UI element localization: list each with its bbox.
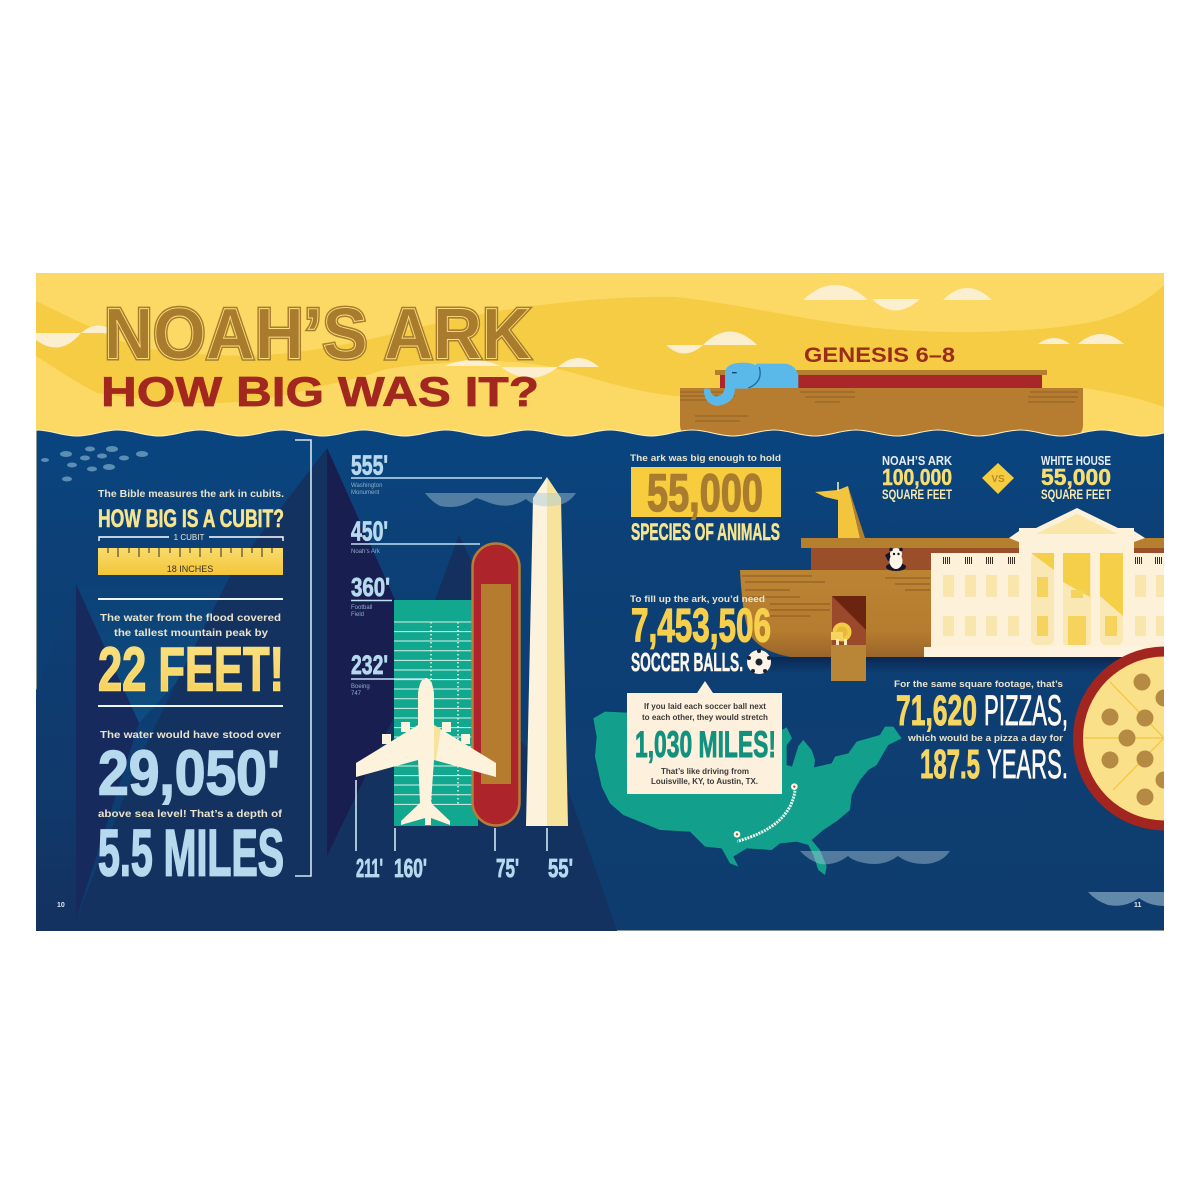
text block: 22 feet bbox=[98, 614, 280, 692]
text block: depth: The water would have stood over bbox=[100, 729, 281, 741]
text block: pizzas: PIZZAS, bbox=[984, 687, 1068, 735]
comparison: Noah's Ark bbox=[882, 454, 953, 502]
ruler: 1 CUBIT bbox=[174, 533, 204, 542]
text block: pizzas: 187.5 bbox=[920, 741, 980, 787]
text block: depth: 29,050' bbox=[98, 738, 280, 808]
clouds bbox=[36, 285, 1124, 378]
height labels: Boeing bbox=[351, 684, 370, 690]
mountains bbox=[36, 448, 617, 931]
width labels: 211' bbox=[356, 853, 383, 883]
White House bbox=[924, 508, 1167, 657]
text block: pizzas: 71,620 bbox=[896, 687, 977, 735]
callout: Louisville, KY, to Austin, TX. bbox=[651, 777, 758, 786]
callout: to each other, they would stretch bbox=[642, 713, 768, 722]
comparison: Noah's Ark: NOAH’S ARK bbox=[882, 454, 952, 468]
title: Noah's Ark bbox=[106, 306, 534, 361]
windows bbox=[943, 575, 1167, 636]
icon: pizza bbox=[1073, 646, 1200, 830]
comparison: White House bbox=[1041, 454, 1112, 502]
page number 10: 10 bbox=[57, 902, 65, 909]
text block: 55,000 species: 55,000 bbox=[647, 464, 763, 523]
scripture reference: GENESIS 6–8 bbox=[804, 344, 955, 367]
comparison: White House: SQUARE FEET bbox=[1041, 487, 1112, 502]
width labels: 75' bbox=[496, 853, 519, 883]
US map bbox=[593, 712, 902, 875]
text block: 22 feet: the tallest mountain peak by bbox=[114, 627, 268, 639]
icon: giraffe bbox=[815, 482, 865, 538]
water background bbox=[36, 430, 1184, 931]
shadow under the ark bbox=[770, 657, 1122, 670]
cloud reflection bbox=[425, 493, 576, 507]
door bbox=[831, 596, 866, 681]
width labels: 160' bbox=[394, 853, 427, 883]
comparison: Noah's Ark: 100,000 bbox=[882, 464, 952, 490]
football field bbox=[394, 600, 478, 826]
text block: depth: 5.5 MILES bbox=[98, 816, 284, 890]
icon: elephant bbox=[704, 363, 798, 406]
callout: That’s like driving from bbox=[661, 767, 749, 776]
width labels: 55' bbox=[548, 853, 573, 883]
title: Noah's Ark: NOAH’S ARK bbox=[104, 294, 531, 374]
height labels: Field bbox=[351, 612, 364, 618]
icon: lion bbox=[831, 622, 852, 645]
height labels: 450' bbox=[351, 516, 388, 546]
page number 11: 11 bbox=[1134, 902, 1142, 909]
bracket bbox=[295, 440, 311, 876]
callout: 1,030 MILES! bbox=[635, 724, 776, 765]
text block: 55,000 species bbox=[630, 453, 781, 546]
callout: If you laid each soccer ball next bbox=[644, 702, 766, 711]
subtitle: HOW BIG WAS IT? bbox=[101, 368, 539, 415]
fish school bbox=[41, 446, 148, 482]
text block: pizzas: YEARS. bbox=[987, 741, 1068, 787]
portico bbox=[1031, 553, 1123, 645]
height labels: Noah’s Ark bbox=[351, 549, 381, 555]
text block: cubit bbox=[98, 489, 284, 575]
title: Noah's Ark: NOAH’S ARK bbox=[104, 294, 531, 374]
height labels: Monument bbox=[351, 490, 380, 496]
small ark on the waves bbox=[680, 363, 1083, 438]
text block: 55,000 species: SPECIES OF ANIMALS bbox=[631, 519, 780, 546]
text block: depth bbox=[98, 729, 284, 890]
text block: soccer balls: SOCCER BALLS. bbox=[631, 647, 743, 677]
ruler bbox=[98, 533, 283, 575]
route chain bbox=[734, 783, 798, 841]
text block: 22 feet: The water from the flood covered bbox=[100, 612, 281, 624]
height labels: 232' bbox=[351, 650, 388, 680]
text block: cubit: HOW BIG IS A CUBIT? bbox=[98, 505, 284, 533]
text block: 55,000 species: The ark was big enough to hold bbox=[630, 453, 781, 464]
height labels bbox=[351, 450, 542, 697]
airplane bbox=[356, 678, 496, 825]
text block: soccer balls: To fill up the ark, you’d need bbox=[630, 594, 765, 605]
Washington Monument bbox=[526, 477, 568, 826]
ruler: 18 INCHES bbox=[167, 564, 213, 574]
height labels: 747 bbox=[351, 691, 362, 697]
ark top view bbox=[472, 544, 520, 826]
text block: depth: above sea level! That’s a depth of bbox=[98, 808, 283, 820]
comparison: White House: WHITE HOUSE bbox=[1041, 454, 1111, 468]
cloud reflection lower bbox=[800, 851, 950, 864]
comparison: White House: 55,000 bbox=[1041, 464, 1111, 490]
icon: VS diamond bbox=[982, 463, 1014, 494]
icon: soccer ball bbox=[747, 649, 771, 674]
text block: soccer balls bbox=[630, 594, 771, 677]
callout bbox=[627, 681, 782, 794]
text block: pizzas: which would be a pizza a day for bbox=[907, 733, 1063, 744]
big ark bbox=[740, 482, 1164, 681]
height labels: Football bbox=[351, 605, 372, 611]
panel: sky bbox=[36, 273, 1164, 443]
text block: cubit: The Bible measures the ark in cubits. bbox=[98, 489, 284, 500]
height labels: Washington bbox=[351, 483, 382, 489]
text block: pizzas: For the same square footage, that’s bbox=[894, 679, 1063, 690]
icon: panda bbox=[885, 548, 906, 571]
icon: VS diamond: VS bbox=[991, 474, 1005, 485]
cloud reflection corner bbox=[1088, 892, 1164, 906]
height labels: 360' bbox=[351, 572, 390, 602]
text block: pizzas bbox=[894, 679, 1068, 787]
text block: soccer balls: 7,453,506 bbox=[631, 598, 771, 652]
width labels bbox=[356, 780, 573, 883]
text block: 22 feet: 22 FEET! bbox=[98, 636, 284, 704]
comparison: Noah's Ark: SQUARE FEET bbox=[882, 487, 953, 502]
height labels: 555' bbox=[351, 450, 388, 480]
